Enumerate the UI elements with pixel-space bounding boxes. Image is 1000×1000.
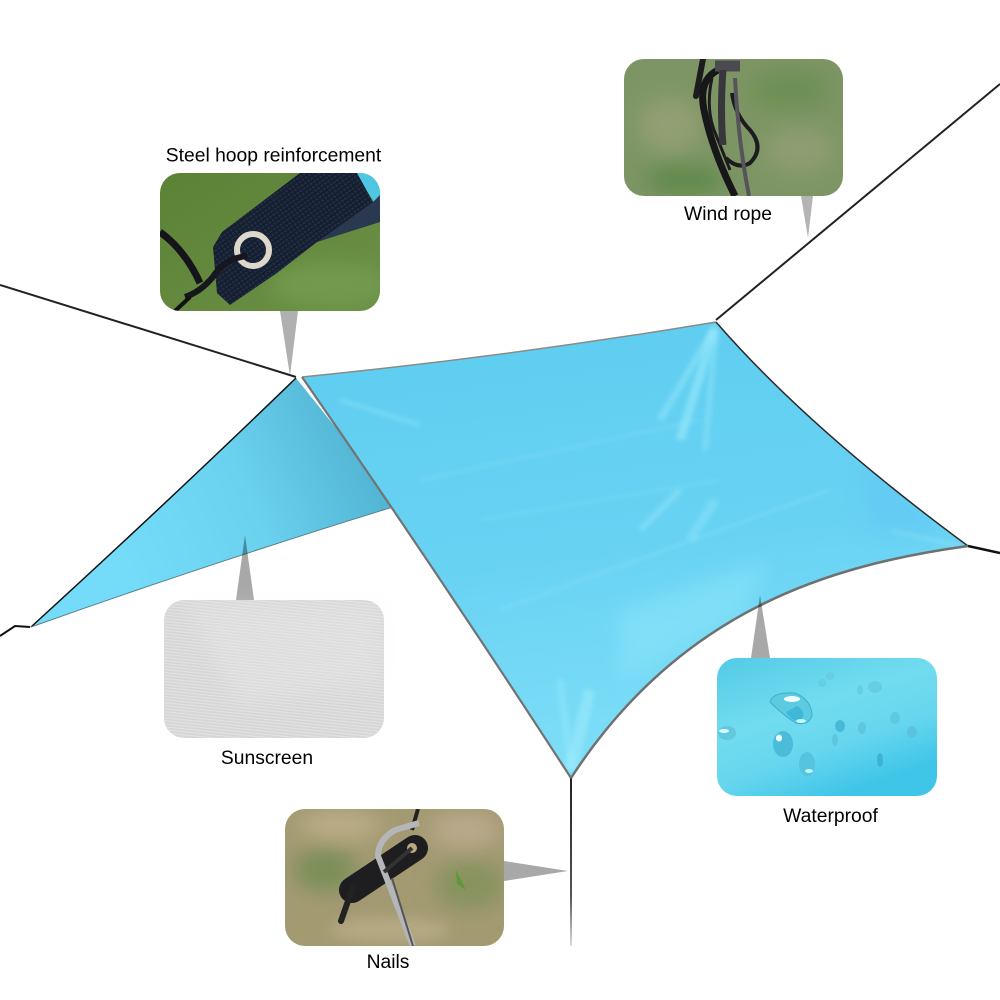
photo: steel hoop — [160, 173, 390, 311]
pointer: wind rope — [801, 196, 813, 238]
label: nails: Nails — [367, 952, 409, 973]
guy rope: upper left — [0, 285, 296, 377]
photo: wind rope — [624, 59, 843, 196]
pointer: waterproof — [751, 595, 770, 658]
pointer: steel hoop — [280, 311, 298, 376]
guy rope: right — [968, 546, 1000, 553]
label: sunscreen: Sunscreen — [221, 748, 313, 769]
guy rope: left — [0, 626, 30, 636]
guy rope: upper right — [716, 84, 1000, 320]
label: wind rope: Wind rope — [684, 204, 772, 225]
pointer: sunscreen — [236, 535, 254, 600]
main tarp — [302, 322, 968, 778]
guy rope: bottom — [570, 778, 572, 946]
wrinkles fanning from corners — [340, 325, 960, 770]
heading: steel hoop reinforcement: Steel hoop reinforcement — [166, 146, 382, 166]
pointer: nails — [504, 861, 568, 881]
left tarp wing — [31, 378, 402, 627]
photo: waterproof droplets — [717, 658, 937, 796]
photo: nails — [285, 809, 505, 946]
label: waterproof: Waterproof — [783, 806, 878, 827]
photo: sunscreen fabric — [164, 600, 384, 738]
